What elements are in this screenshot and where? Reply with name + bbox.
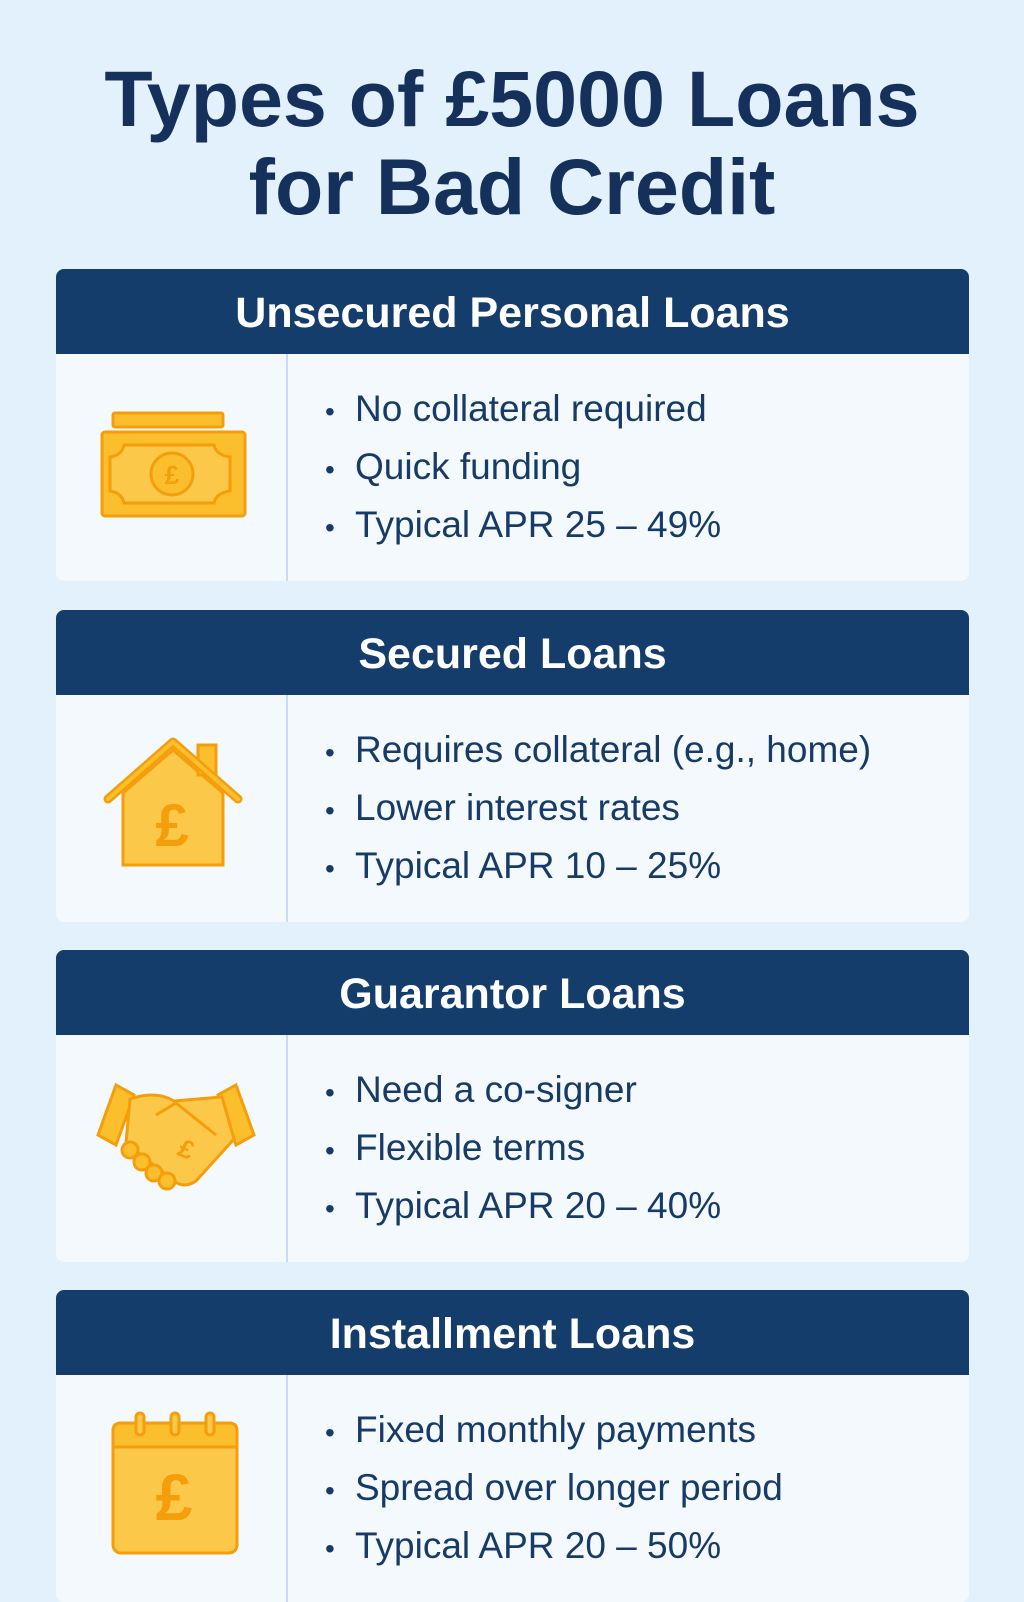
panel: secured loans: [56, 610, 969, 922]
icon: banknote: £: [165, 460, 180, 490]
panel: unsecured personal loans: [56, 269, 969, 581]
bullets: Typical APR 20 – 40%: [355, 1185, 721, 1226]
icon: calendar: [112, 1412, 238, 1554]
bullets: Typical APR 25 – 49%: [355, 504, 721, 545]
heading: Guarantor Loans: [339, 970, 686, 1018]
bullets: [326, 1409, 783, 1566]
bullets: Quick funding: [355, 446, 581, 487]
bullets: Typical APR 10 – 25%: [355, 845, 721, 886]
bullets: [326, 729, 871, 886]
bullets: Typical APR 20 – 50%: [355, 1525, 721, 1566]
title: for Bad Credit: [249, 142, 775, 231]
icon: calendar: £: [156, 1460, 193, 1534]
icon: house: [104, 738, 242, 866]
bullets: Fixed monthly payments: [355, 1409, 756, 1450]
heading: [56, 269, 969, 354]
icon: handshake: £: [174, 1132, 200, 1166]
bullets: [326, 388, 721, 545]
bullets: Flexible terms: [355, 1127, 585, 1168]
icon: banknote: [100, 412, 246, 518]
bullets: Lower interest rates: [355, 787, 680, 828]
heading: Unsecured Personal Loans: [235, 289, 790, 337]
title: [104, 54, 920, 231]
icon: handshake: [96, 1082, 256, 1190]
icon: house: £: [155, 792, 189, 859]
title: Types of £5000 Loans: [104, 54, 920, 143]
panel: guarantor loans: [56, 950, 969, 1262]
bullets: Spread over longer period: [355, 1467, 783, 1508]
bullets: Need a co-signer: [355, 1069, 637, 1110]
heading: [56, 950, 969, 1035]
panel: installment loans: [56, 1290, 969, 1602]
bullets: No collateral required: [355, 388, 707, 429]
bullets: [326, 1069, 721, 1226]
heading: Installment Loans: [330, 1310, 695, 1358]
bullets: Requires collateral (e.g., home): [355, 729, 871, 770]
heading: [56, 610, 969, 695]
heading: Secured Loans: [358, 630, 667, 678]
heading: [56, 1290, 969, 1375]
